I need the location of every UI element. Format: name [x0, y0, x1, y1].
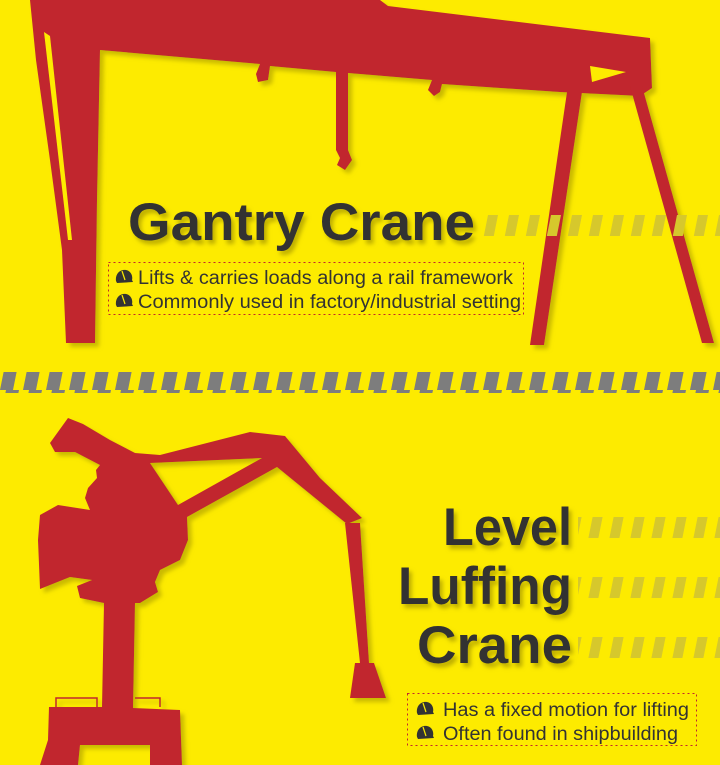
title: Level Luffing Crane: Crane: [417, 616, 572, 675]
bullet box: gantry: Commonly used in factory/industrial setting: [138, 292, 521, 313]
title: Level Luffing Crane: [398, 498, 572, 675]
gantry title stripes: [478, 215, 720, 236]
bullet box: luffing: [408, 694, 696, 746]
bullet box: luffing: Often found in shipbuilding: [443, 724, 678, 745]
title: Gantry Crane: Gantry Crane: [128, 193, 475, 252]
icon: gantry crane silhouette: [30, 0, 714, 345]
bullet box: gantry: Lifts & carries loads along a rail framework: [138, 268, 514, 289]
title: Level Luffing Crane: Luffing: [398, 557, 572, 616]
icon: level luffing crane silhouette: [38, 418, 386, 765]
level luffing title stripes: [578, 517, 720, 658]
bullet box: gantry: [108, 262, 524, 314]
divider stripe band: [0, 372, 720, 393]
title: Level Luffing Crane: Level: [443, 498, 572, 557]
bullet box: luffing: Has a fixed motion for lifting: [443, 700, 689, 721]
